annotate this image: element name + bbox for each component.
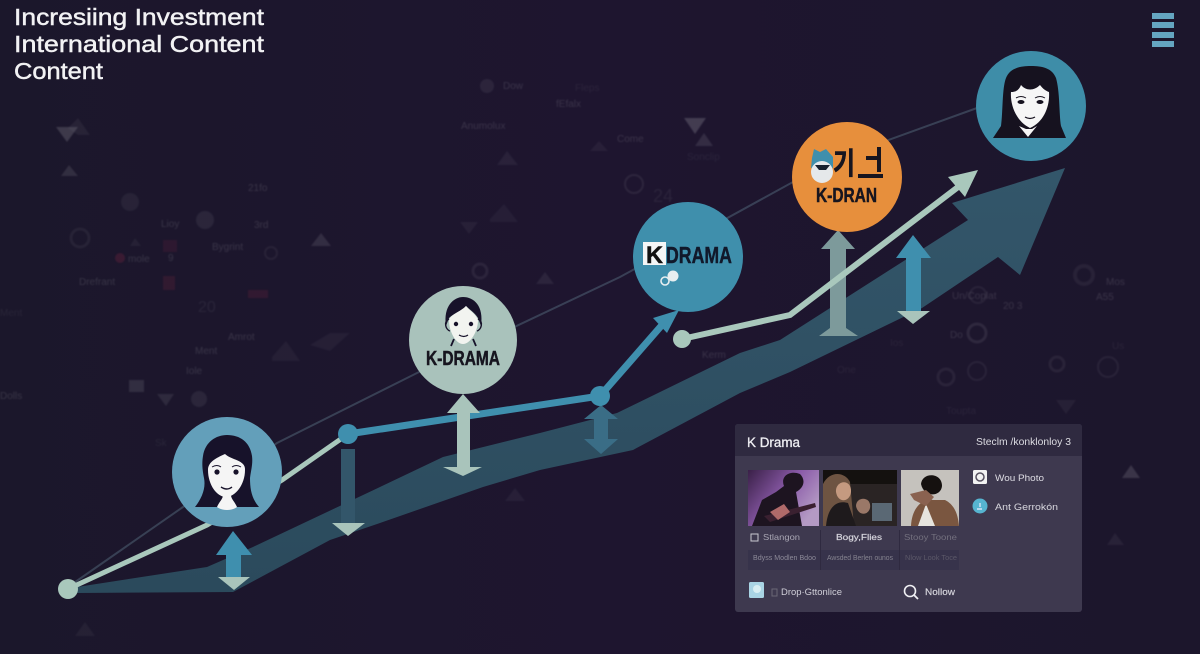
faint background pattern: Ment: [0, 308, 22, 319]
trend line: sage segment with arrow: [673, 170, 978, 348]
faint background pattern: Us: [1112, 341, 1124, 352]
faint background pattern: Come: [617, 134, 644, 145]
icon row: account: Ant Gerrokón: [995, 502, 1058, 513]
faint background pattern: 20 3: [1003, 301, 1023, 312]
photo 2: two people: [823, 470, 897, 526]
faint background pattern: One: [837, 365, 856, 376]
start point: [58, 579, 78, 599]
faint background pattern: Anumolux: [461, 121, 505, 132]
vertical arrow 5: [819, 230, 858, 336]
title: Content: [14, 58, 104, 84]
trend line: first segment: [68, 434, 348, 589]
faint background pattern: Kerm: [702, 350, 726, 361]
trend line: blue segment with arrow: [338, 310, 679, 444]
panel: K Drama card: [735, 424, 1082, 612]
badge: orange Korean K-DRAN: K-DRAN: [816, 185, 877, 207]
faint background pattern: 20: [198, 299, 216, 316]
badge: K-DRAMA with face: K-DRAMA: [426, 348, 500, 370]
sub-caption bar: [748, 530, 959, 570]
faint background pattern: 24: [653, 186, 673, 206]
vertical arrow 6: [896, 235, 931, 324]
caption row: Stooy Toone: [904, 532, 957, 542]
caption row: [751, 532, 957, 542]
faint background pattern: Iole: [186, 366, 203, 377]
panel header: Steclm /konklonloy 3: [976, 437, 1071, 448]
vertical arrow 3: [443, 394, 482, 476]
faint background pattern: 21fo: [248, 183, 268, 194]
panel header: K Drama: [747, 435, 800, 450]
faint background pattern: Amrot: [228, 332, 255, 343]
panel header: [735, 424, 1082, 456]
faint background pattern: fEfalx: [556, 99, 581, 110]
vertical arrow 4: [584, 405, 618, 454]
caption row: Stlangon: [763, 532, 800, 542]
footer item: drop: Drop·Gttonlice: [781, 587, 842, 598]
faint background pattern: Bygrint: [212, 242, 243, 253]
badge: K-DRAMA logo: [633, 202, 743, 312]
footer item: search: [904, 586, 955, 599]
icon row: photo: [973, 470, 1044, 484]
badge: K-DRAMA with face: [409, 286, 517, 394]
faint background pattern: 9: [168, 253, 174, 264]
large rising band arrow: [77, 168, 1065, 593]
badge: orange Korean K-DRAN: 기: [833, 148, 855, 181]
faint background pattern: Un/Coplat: [952, 291, 997, 302]
footer item: search: Nollow: [925, 587, 955, 598]
badge: orange Korean K-DRAN: [792, 122, 902, 232]
icon row: photo: Wou Photo: [995, 473, 1044, 484]
title: International Content: [14, 31, 265, 57]
faint background pattern: mole: [128, 254, 150, 265]
sub-caption bar: Awsded Berlen ounos: [827, 555, 893, 562]
faint background pattern: Fleps: [575, 83, 599, 94]
faint background pattern: Sonclip: [687, 152, 720, 163]
title: [14, 4, 265, 84]
icon: menu: [1152, 13, 1174, 47]
footer item: drop: [749, 582, 842, 598]
faint background pattern: 3rd: [254, 220, 268, 231]
vertical arrow 2: [332, 449, 365, 536]
faint background pattern: Dolls: [0, 391, 22, 402]
badge: K-DRAMA logo: K: [646, 242, 664, 269]
avatar: woman (top): [976, 51, 1086, 161]
badge: K-DRAMA logo: DRAMA: [666, 242, 732, 268]
faint background pattern: Ment: [195, 346, 217, 357]
faint background pattern: Dow: [503, 81, 524, 92]
title: Incresiing Investment: [14, 4, 265, 30]
photo 1: guitarist: [748, 470, 819, 526]
faint background pattern: A55: [1096, 292, 1114, 303]
faint background pattern: Lioy: [161, 219, 179, 230]
faint background pattern: Do: [950, 330, 963, 341]
vertical arrow 1: [216, 531, 252, 590]
caption row: Bogy,Flies: [836, 532, 882, 542]
faint background pattern: Ios: [890, 338, 903, 349]
faint background pattern: Sk: [155, 438, 168, 449]
faint background pattern: Mos: [1106, 277, 1125, 288]
photo 3: person: [901, 470, 959, 526]
avatar: woman (bottom): [172, 417, 282, 527]
thin background trend line: [68, 108, 977, 587]
faint background pattern: Toupta: [946, 406, 976, 417]
sub-caption bar: Nlow Look Toce: [905, 555, 957, 562]
icon row: account: [972, 498, 1058, 514]
faint background pattern: Drefrant: [79, 277, 115, 288]
sub-caption bar: Bdyss Modlen Bdoo: [753, 555, 816, 562]
